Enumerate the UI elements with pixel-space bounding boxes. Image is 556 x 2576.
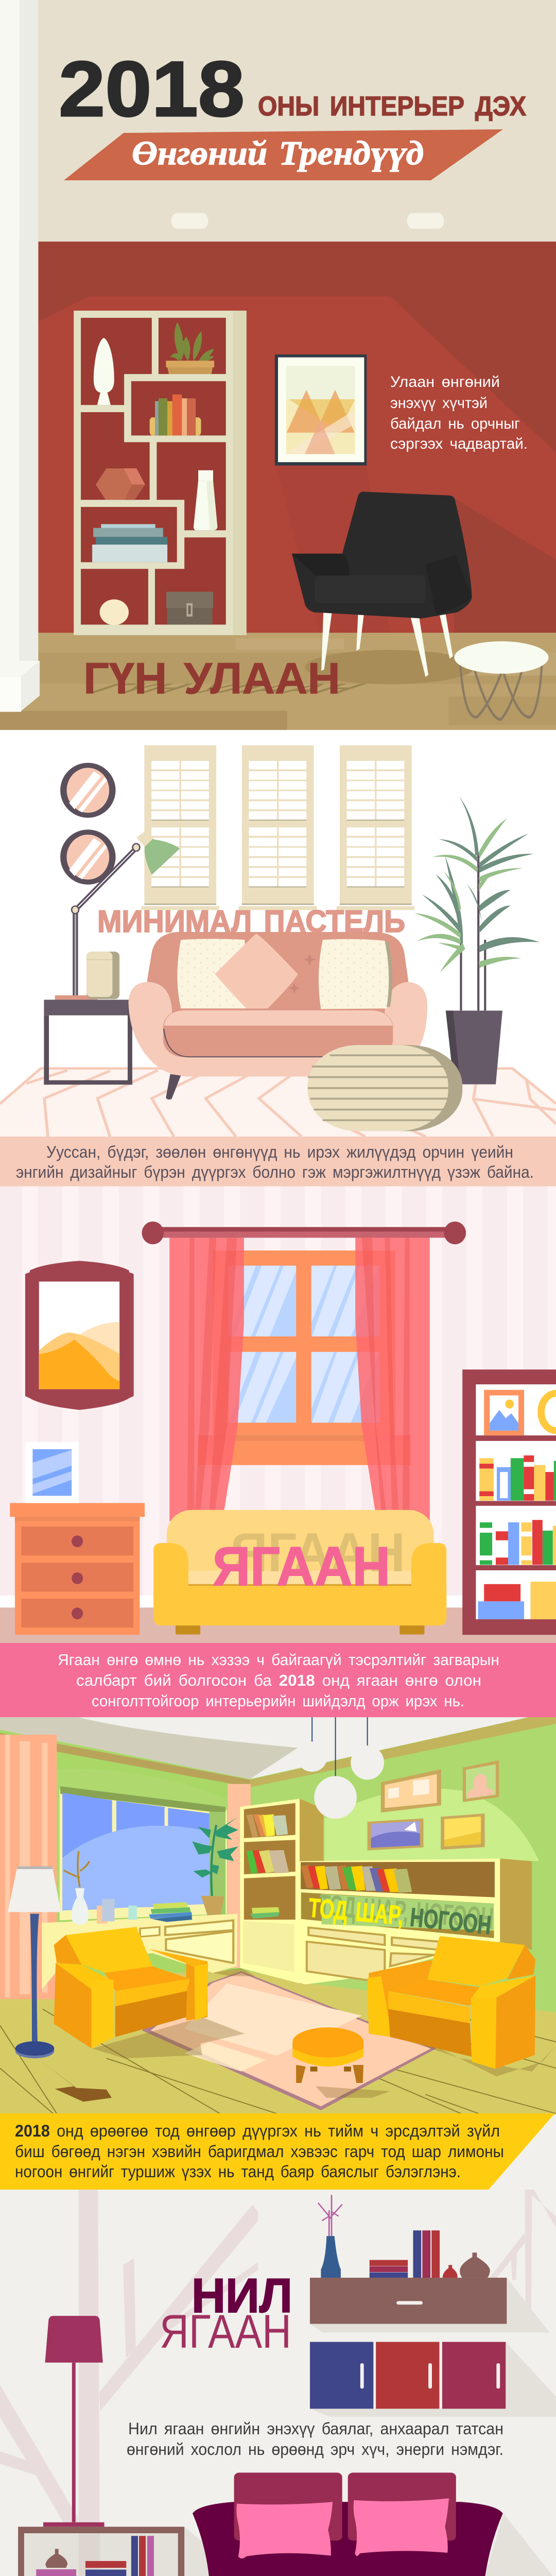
caption text xyxy=(16,1143,534,1181)
diamond cushion xyxy=(215,934,298,1008)
violet description: Нил ягаан өнгийн энэхүү баялаг, анхаарал татсан xyxy=(128,2419,503,2438)
yellow caption text: 2018 онд өрөөгөө тод өнгөөр дүүргэх нь тийм ч эрсдэлтэй зүйл xyxy=(15,2122,500,2140)
ceiling lights xyxy=(171,213,444,229)
low shelf xyxy=(18,2527,184,2576)
heading: green: НОГООН xyxy=(409,1902,493,1940)
violet sofa xyxy=(193,2472,503,2576)
red wall xyxy=(0,242,556,635)
palm plant xyxy=(414,796,540,1011)
low window cabinet xyxy=(42,1914,237,1989)
violet description: өнгөний хослол нь өрөөнд эрч хүч, энерги нэмдэг. xyxy=(127,2440,503,2459)
round mirrors xyxy=(60,763,116,885)
heading shadow: deep red: ГҮН УЛААН xyxy=(74,681,379,697)
caption text: энгийн дизайныг бүрэн дүүргэх болно гэж мэргэжилтнүүд үзэж байна. xyxy=(16,1163,534,1181)
striped wall xyxy=(0,1187,556,1597)
white column xyxy=(0,0,40,712)
books lower shelf xyxy=(250,1907,280,1919)
three shuttered windows xyxy=(141,745,414,910)
yellow caption text: ногоон өнгийг туршиж үзэх нь танд баяр баяслыг бэлэглэнэ. xyxy=(15,2162,461,2181)
pink caption text: салбарт бий болгосон ба 2018 онд ягаан өнгө олон xyxy=(76,1671,481,1689)
patterned cushions xyxy=(177,939,392,1009)
bottle xyxy=(194,470,217,530)
heading: bright yellow: ТОД ШАР, xyxy=(307,1893,405,1931)
title number: 2018: 2018 xyxy=(59,45,245,133)
yellow caption text xyxy=(15,2122,504,2181)
stacked books xyxy=(92,524,167,562)
rug shadow shapes xyxy=(92,1968,556,2098)
bookcase xyxy=(462,1369,556,1635)
text: deep red description xyxy=(390,374,528,452)
blue vase with twigs xyxy=(318,2195,342,2278)
pink caption text: Ягаан өнгө өмнө нь хэзээ ч байгаагүй тэсрэлтийг загварын xyxy=(58,1651,499,1669)
yellow caption band xyxy=(0,2113,555,2190)
book stack on cabinet xyxy=(149,1902,192,1922)
window xyxy=(60,1786,227,1920)
baseboard and floor xyxy=(0,1596,556,1644)
caption band xyxy=(0,1137,556,1187)
text: deep red description: сэргээх чадвартай. xyxy=(390,435,528,452)
title: year of interior: ОНЫ ИНТЕРЬЕР ДЭХ xyxy=(258,91,526,122)
books row one xyxy=(479,1455,556,1501)
pouf xyxy=(308,1045,462,1131)
window plant xyxy=(192,1817,238,1916)
text: deep red description: байдал нь орчныг xyxy=(390,415,520,432)
plant pot xyxy=(446,1011,502,1084)
gem xyxy=(96,468,145,500)
curtains xyxy=(169,1238,430,1521)
potted plant xyxy=(166,322,214,374)
walls xyxy=(0,1717,556,2115)
ceiling xyxy=(0,1717,556,1787)
panel: minimal pastel room xyxy=(0,730,556,1187)
mirror with hills xyxy=(25,1261,134,1410)
curtain rod xyxy=(142,1222,466,1244)
ottoman xyxy=(292,2027,363,2083)
framed art xyxy=(275,354,367,466)
wall pictures xyxy=(368,1760,499,1850)
yellow sofa xyxy=(153,1510,446,1634)
books row two xyxy=(480,1520,556,1565)
rug with chevrons xyxy=(0,1069,556,1137)
text: deep red description: энэхүү хүчтэй xyxy=(390,395,488,412)
wall shadows xyxy=(184,2278,556,2576)
pink caption band xyxy=(0,1643,556,1718)
shelf ornaments xyxy=(484,1390,556,1435)
right armchair xyxy=(368,1936,535,2069)
small picture xyxy=(25,1442,79,1503)
tall bookcase xyxy=(240,1799,323,1984)
heading shadow: pink: ЯГААН xyxy=(231,1521,405,1583)
heading: pink: ЯГААН xyxy=(213,1535,390,1597)
wide cabinet xyxy=(300,1858,532,1985)
floor xyxy=(0,1970,556,2113)
armchair xyxy=(292,492,472,677)
box and basket xyxy=(478,1582,556,1619)
floor xyxy=(0,633,556,730)
floor lamp xyxy=(43,2316,105,2527)
window xyxy=(198,1250,411,1465)
white finial xyxy=(94,338,114,405)
panel: deep red room with title xyxy=(0,0,556,730)
cabinet doors xyxy=(310,2342,506,2409)
sofa xyxy=(128,932,427,1099)
caption text: Уусcан, бүдэг, зөөлөн өнгөнүүд нь ирэх жилүүдэд орчин үеийн xyxy=(46,1143,513,1161)
books xyxy=(150,395,201,435)
side table xyxy=(44,995,132,1084)
title: colour trends script: Өнгөний Трендүүд xyxy=(132,134,424,172)
cabinet door panels xyxy=(307,1927,440,1983)
pendant lamps xyxy=(297,1717,384,1819)
round side table xyxy=(454,641,549,719)
books upper shelves xyxy=(247,1814,289,1874)
tree silhouettes xyxy=(0,2190,556,2576)
pink caption text xyxy=(58,1651,499,1710)
heading: minimal pastel: МИНИМАЛ ПАСТЕЛЬ xyxy=(97,904,405,939)
bookshelf xyxy=(74,311,247,635)
curtains xyxy=(0,1735,251,1999)
rug xyxy=(142,1971,436,2110)
ceiling xyxy=(0,0,556,242)
heading: violet bold: НИЛ xyxy=(192,2268,292,2323)
panel: pink room xyxy=(0,1187,556,1718)
left armchair xyxy=(54,1927,208,2048)
dresser xyxy=(10,1503,145,1635)
vase and candles xyxy=(64,1851,137,1925)
wide shelf books xyxy=(301,1865,412,1893)
violet description xyxy=(127,2419,503,2459)
wall shelf with drawer xyxy=(310,2278,507,2324)
box xyxy=(166,592,213,624)
pink caption text: сонголттойгоор интерьерийн шийдэлд орж ирэх нь. xyxy=(92,1692,464,1710)
jar xyxy=(86,952,119,999)
floor lamp xyxy=(8,1867,112,2102)
title ribbon xyxy=(64,129,503,180)
heading: violet light: ЯГААН xyxy=(160,2306,291,2358)
panel: ultra violet room xyxy=(0,2113,556,2576)
books and small vases xyxy=(370,2230,490,2278)
panel: bright yellow and green room xyxy=(0,1717,556,2190)
yellow caption text: биш бөгөөд нэгэн хэвийн баригдмал хэвээс гарч тод шар лимоны xyxy=(15,2142,504,2161)
egg xyxy=(100,599,129,625)
floor lamp xyxy=(72,831,180,999)
text: deep red description: Улаан өнгөний xyxy=(390,374,500,391)
heading: deep red: ГҮН УЛААН xyxy=(83,654,340,703)
